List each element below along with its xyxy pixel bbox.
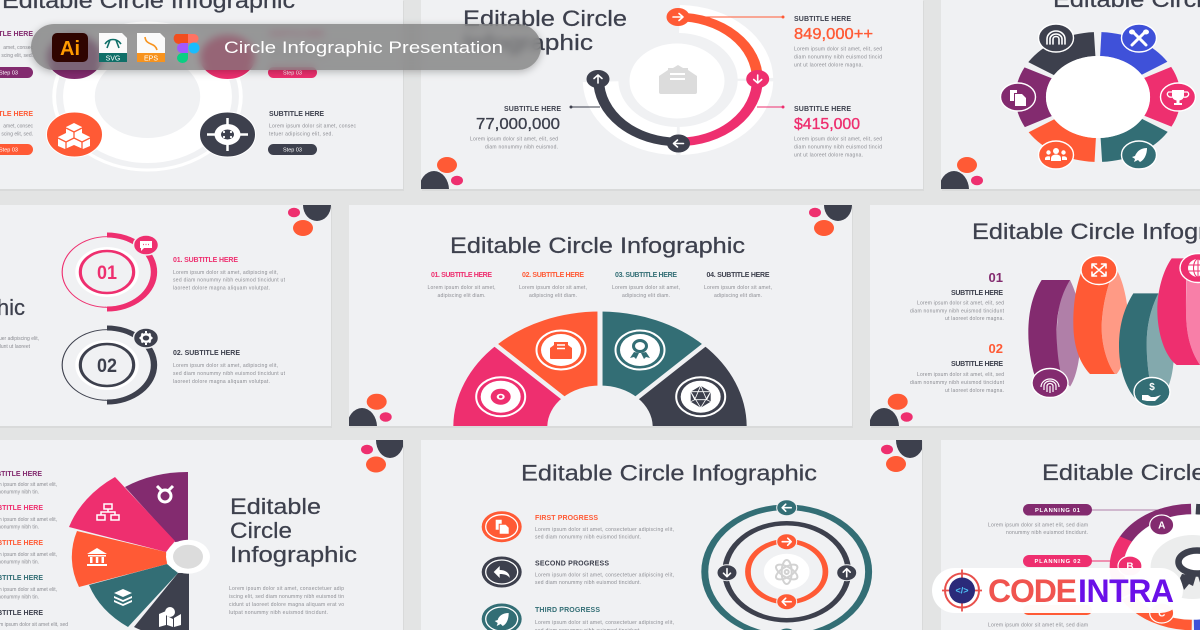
- product name: Circle Infographic Presentation: [224, 39, 503, 57]
- icon: fingerprint arches: [1038, 24, 1074, 52]
- column 01: 01. SUBTITLE HERE: [431, 272, 492, 279]
- text block: top right step: tetuer adipiscing elit, sed.: [269, 53, 325, 59]
- arrow: orange left: [777, 594, 797, 610]
- title: slide B: Editable Circle: [463, 6, 627, 31]
- text block: bottom right step: Step 03: [283, 148, 302, 154]
- column 03: [612, 272, 680, 299]
- pill: planning 03: [1023, 605, 1092, 615]
- panel: slide with fan chart: [0, 422, 404, 630]
- icon: rocket: [1122, 141, 1156, 169]
- arc chart: [599, 17, 757, 142]
- semicircle chart: [459, 307, 741, 538]
- stat: 849,000++: 849,000++: [794, 26, 873, 43]
- arrow: teal bottom: [777, 628, 797, 630]
- decorative dots: [869, 394, 913, 446]
- icon: Adobe Illustrator: Ai: [60, 38, 80, 60]
- icon: fingerprint: [1032, 368, 1068, 398]
- stat: $415,000: unt ut laoreet dolore magna.: [794, 152, 863, 158]
- text block: planning 01: nonummy nibh euismod tincidunt.: [1006, 530, 1088, 536]
- pill: planning 02: [1023, 555, 1092, 567]
- stat: $415,000: $415,000: [794, 116, 860, 133]
- icon: bank: [87, 548, 107, 566]
- text block: subtitle 01: 01. SUBTITLE HERE: [173, 257, 238, 264]
- column 03: 03. SUBTITLE HERE: [615, 272, 677, 279]
- badge A: [1150, 515, 1174, 535]
- decorative dots bottom left: [347, 394, 392, 446]
- panel: slide with 3D cylinders: [869, 205, 1200, 446]
- text block: top left step: [0, 31, 33, 78]
- text block: subtitle 02: laoreet dolore magna aliquam volutpat.: [173, 379, 270, 385]
- panel: slide with segmented arc and numbers: [419, 0, 923, 209]
- text block: top left step: amet, consec: [3, 45, 33, 51]
- text block: 02: SUBTITLE HERE: [951, 361, 1003, 368]
- six segment ring chart: [1018, 32, 1178, 162]
- stat: 77,000,000: Lorem ipsum dolor sit amet, elit, sed: [470, 136, 558, 142]
- icon: layers: [114, 589, 132, 606]
- arrow: orange right: [777, 534, 797, 550]
- white ring background: [599, 17, 757, 143]
- text block: top right step: SUBTITLE HERE: [269, 31, 324, 38]
- text block: bottom left step: [0, 111, 33, 155]
- header pill: file formats and product name: [31, 24, 541, 70]
- text block: description: lutpat nonummy nibh euismod tincidunt.: [229, 610, 328, 616]
- gauge 01: [60, 235, 154, 309]
- text list: [0, 471, 68, 628]
- decorative dots: [941, 157, 983, 189]
- title: slide G: [230, 494, 357, 567]
- text block: top right step: [268, 30, 322, 78]
- icon: first progress: [482, 511, 522, 542]
- icon: network: [97, 504, 119, 520]
- column 04: adipiscing elit diam.: [714, 293, 762, 299]
- logo badge: CODEINTRA: [932, 568, 1183, 613]
- callout lines: [570, 16, 784, 108]
- decorative dots: [421, 157, 463, 189]
- stat: 77,000,000: diam nonummy nibh euismod.: [485, 144, 558, 150]
- icon: third progress: [482, 604, 522, 630]
- text block: 01: [910, 270, 1005, 322]
- text block: 02: diam nonummy nibh euismod tincidunt: [910, 380, 1005, 386]
- stat: $415,000: SUBTITLE HERE: [794, 106, 851, 113]
- wedge: purple: [125, 472, 188, 542]
- icon: people: [1038, 141, 1074, 169]
- text block: 02: 02: [989, 341, 1003, 356]
- column 01: [428, 272, 496, 299]
- text block: 01: ut laoreet dolore magna.: [945, 316, 1004, 322]
- stat: 849,000++: [794, 16, 882, 68]
- icon: expand: [1081, 256, 1117, 284]
- icon: atom: [774, 560, 800, 584]
- cylinder chart: [1028, 258, 1200, 400]
- text block: first progress: Lorem ipsum dolor sit amet, consectetuer adipiscing elit,: [535, 527, 674, 533]
- text block: subtitle 01: sed diam nonummy nibh euismod tincidunt ut: [173, 278, 286, 284]
- text block: 02: [910, 341, 1005, 394]
- icon: Figma: [174, 34, 200, 63]
- stat: $415,000: Lorem ipsum dolor sit amet, elit, sed: [794, 136, 882, 142]
- pill: planning 01: [1023, 504, 1092, 516]
- stat: 849,000++: SUBTITLE HERE: [794, 16, 851, 23]
- arrow: teal left: [777, 500, 797, 516]
- badge C: [1150, 603, 1174, 623]
- stat: 849,000++: diam nonummy nibh euismod tincid: [794, 54, 882, 60]
- badge C: C: [1158, 608, 1165, 620]
- arrow: orange right: [666, 8, 690, 26]
- gauge 02: [60, 328, 154, 402]
- wordmark: [988, 573, 1174, 609]
- wordmark: CODE: [988, 573, 1077, 609]
- column 02: Lorem ipsum dolor sit amet,: [519, 285, 587, 291]
- arrow: dark down: [717, 565, 737, 581]
- gauge 01: 01: [97, 263, 117, 284]
- text block: top left step: scing elit, sed.: [1, 53, 33, 59]
- wedge: dark: [134, 573, 189, 630]
- column 04: 04. SUBTITLE HERE: [706, 272, 770, 279]
- wedge: teal: [89, 564, 178, 627]
- decorative dots: [361, 422, 404, 472]
- title: slide B: [463, 6, 627, 55]
- text block: description: [229, 586, 344, 616]
- panel: slide with planning ring: [941, 440, 1200, 630]
- text block: intro: [0, 336, 39, 348]
- text block: bottom right step: SUBTITLE HERE: [269, 111, 324, 118]
- icon: Adobe Illustrator: [52, 33, 88, 62]
- title: slide G: Infographic: [230, 542, 357, 567]
- hub: [166, 540, 210, 574]
- badge B: B: [1126, 562, 1134, 572]
- text block: second progress: sed diam nonummy nibh euismod tincidunt.: [535, 580, 641, 586]
- icon: dark circle with target: [200, 112, 256, 157]
- text block: subtitle 02: 02. SUBTITLE HERE: [173, 350, 240, 357]
- decorative dots top right: [809, 189, 852, 236]
- text block: subtitle 02: [173, 350, 286, 385]
- icon: hand with dollar: [1134, 378, 1170, 406]
- arrow: dark up: [837, 565, 857, 581]
- panel: slide with four step circles: [0, 0, 403, 189]
- wedge: pink: [69, 477, 175, 552]
- icon: trophy: [1160, 83, 1196, 111]
- text block: subtitle 01: [173, 257, 286, 292]
- icon: chat bubble: [134, 235, 158, 255]
- column 02: 02. SUBTITLE HERE: [522, 272, 584, 279]
- title: slide B: Infographic: [463, 30, 593, 55]
- connector lines: [1092, 510, 1160, 561]
- wordmark: INTRA: [1078, 573, 1174, 609]
- icon: orange circle with cubes: [46, 112, 102, 157]
- text block: first progress: FIRST PROGRESS: [535, 515, 598, 522]
- column 02: [519, 272, 587, 299]
- text block: bottom right step: [268, 111, 356, 155]
- icon: polyhedron: [676, 377, 725, 416]
- icon: SVG file: [99, 33, 127, 62]
- panel: slide with six segment ring: [941, 0, 1200, 189]
- white ring diagram: [54, 23, 241, 170]
- icon: gear badge: [1178, 550, 1200, 590]
- icon: medal: [157, 486, 173, 502]
- text block: 01: 01: [989, 270, 1003, 285]
- icon: tools: [1122, 24, 1156, 52]
- concentric ring chart: [705, 507, 869, 630]
- badge A: A: [1158, 520, 1165, 532]
- planning ring chart: [1088, 487, 1200, 630]
- icon: disc: [476, 377, 525, 416]
- title: slide G: Circle: [230, 518, 292, 543]
- column 03: Lorem ipsum dolor sit amet,: [612, 285, 680, 291]
- wedge: orange: [72, 531, 167, 587]
- decorative dots: [288, 189, 331, 236]
- column 04: [704, 272, 772, 299]
- stat: $415,000: diam nonummy nibh euismod tincid: [794, 144, 882, 150]
- text block: 02: Lorem ipsum dolor sit amet, elit, sed: [917, 372, 1004, 378]
- column 02: adipiscing elit diam.: [529, 293, 577, 299]
- text block: bottom left step: amet, consec: [3, 124, 33, 130]
- text block: second progress: SECOND PROGRESS: [535, 560, 609, 568]
- text block: first progress: sed diam nonummy nibh euismod tincidunt.: [535, 534, 641, 540]
- icon: globe: [1180, 254, 1200, 282]
- arrow: dark left: [667, 134, 690, 152]
- text block: 01: diam nonummy nibh euismod tincidunt: [910, 308, 1005, 314]
- icon: gear: [134, 328, 158, 348]
- icon: target code mark: </>: [955, 586, 969, 596]
- stat: 77,000,000: 77,000,000: [476, 116, 560, 133]
- panel: slide with semicircle chart: [347, 189, 852, 538]
- icon: SVG file: SVG: [106, 55, 120, 62]
- text block: planning 01: Lorem ipsum dolor sit amet elit, sed diam: [988, 522, 1088, 528]
- icon: purple step circle: [46, 34, 102, 80]
- text block: subtitle 02: Lorem ipsum dolor sit amet, adipiscing elit,: [173, 363, 278, 369]
- text block: top right step: Step 03: [283, 70, 302, 76]
- text block: subtitle 01: laoreet dolore magna aliquam volutpat.: [173, 286, 270, 292]
- text block: description: iscing elit, sed diam nonummy nibh euismod tin: [229, 594, 344, 600]
- title: slide G: Editable: [230, 494, 321, 519]
- text block: description: cidunt ut laoreet dolore magna aliquam erat vo: [229, 602, 344, 608]
- arrow: pink down: [746, 70, 769, 88]
- stat: 849,000++: Lorem ipsum dolor sit amet, elit, sed: [794, 46, 882, 52]
- gauge 02: 02: [97, 356, 117, 377]
- text block: third progress: Lorem ipsum dolor sit amet, consectetuer adipiscing elit,: [535, 620, 674, 626]
- text block: planning 01: [988, 522, 1088, 536]
- icon: award: [616, 330, 664, 370]
- stat: 849,000++: unt ut laoreet dolore magna.: [794, 62, 863, 68]
- pill: planning 01: PLANNING 01: [1035, 508, 1081, 514]
- arrow: dark up: [586, 70, 610, 88]
- text block: top right step: Lorem ipsum dolor sit amet, consec: [269, 45, 348, 51]
- icon: hand with dollar: $: [1149, 382, 1155, 393]
- stat: $415,000: [794, 106, 882, 158]
- text block: 01: SUBTITLE HERE: [951, 290, 1003, 297]
- column 03: adipiscing elit diam.: [622, 293, 670, 299]
- text block: first progress: [535, 515, 674, 540]
- stat: 77,000,000: SUBTITLE HERE: [504, 106, 561, 113]
- icon: documents: [1000, 83, 1036, 111]
- column 04: Lorem ipsum dolor sit amet,: [704, 285, 772, 291]
- fan chart: [69, 472, 210, 630]
- text block: subtitle 01: Lorem ipsum dolor sit amet, adipiscing elit,: [173, 270, 278, 276]
- text block: second progress: Lorem ipsum dolor sit amet, consectetuer adipiscing elit,: [535, 572, 674, 578]
- icon: mail box: [536, 330, 586, 370]
- title: slide H: Editable Circle Infographic: [521, 460, 817, 486]
- column 01: adipiscing elit diam.: [438, 293, 486, 299]
- center disc with envelope icon: [630, 44, 724, 118]
- stat: 77,000,000: [470, 106, 561, 150]
- text block: 01: Lorem ipsum dolor sit amet, elit, sed: [917, 300, 1004, 306]
- title: slide E: Editable Circle Infographic: [450, 233, 745, 258]
- text block: third progress: [535, 607, 674, 630]
- text block: description: Lorem ipsum dolor sit amet, consectetuer adip: [229, 586, 344, 592]
- column 01: Lorem ipsum dolor sit amet,: [428, 285, 496, 291]
- icon: second progress: [482, 556, 522, 588]
- decorative dots: [881, 422, 924, 472]
- text block: bottom right step: Lorem ipsum dolor sit amet, consec: [269, 124, 356, 130]
- panel: slide with numbered circular gauges: [0, 189, 331, 426]
- icon: map: [159, 607, 181, 627]
- text block: second progress: [535, 560, 674, 586]
- text block: bottom left step: scing elit, sed.: [1, 132, 33, 138]
- text block: planning 03: Lorem ipsum dolor sit amet elit, sed diam: [988, 622, 1088, 628]
- text block: bottom right step: tetuer adipiscing elit, sed.: [269, 132, 333, 138]
- icon: target code mark: [942, 570, 982, 612]
- icon: pink step circle: [200, 34, 256, 80]
- text block: third progress: THIRD PROGRESS: [535, 607, 600, 614]
- text block: 02: ut laoreet dolore magna.: [945, 388, 1004, 394]
- text block: subtitle 02: sed diam nonummy nibh euismod tincidunt ut: [173, 371, 286, 377]
- icon: EPS file: [137, 33, 165, 62]
- pill: planning 02: PLANNING 02: [1034, 559, 1080, 565]
- badge B: [1118, 556, 1142, 576]
- panel: slide with concentric rings: [421, 422, 924, 630]
- icon: EPS file: EPS: [144, 55, 158, 62]
